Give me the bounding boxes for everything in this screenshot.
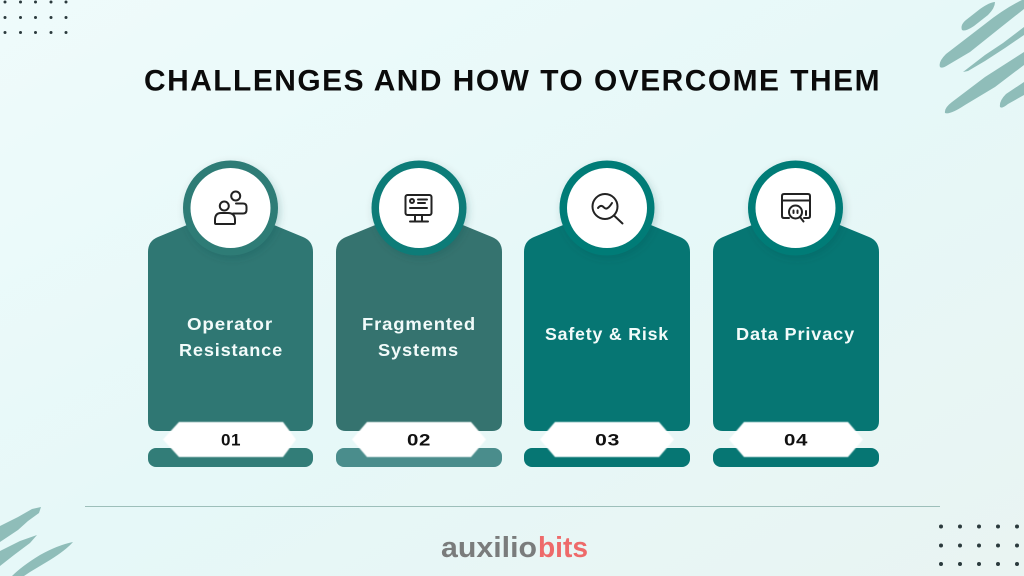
label: Fragmented Systems: Systems (378, 340, 459, 360)
label: Operator Resistance: Operator (187, 314, 273, 334)
number 02: 02 (407, 430, 431, 450)
decoration: top-left dots (4, 0, 68, 34)
icon: monitor (406, 195, 432, 222)
label: Operator Resistance: Resistance (179, 340, 283, 360)
panel: Fragmented Systems (336, 160, 502, 467)
number 04: 04 (784, 430, 808, 450)
panel: Operator Resistance (148, 160, 313, 467)
footer divider (85, 506, 940, 507)
title: CHALLENGES AND HOW TO OVERCOME THEM (144, 64, 881, 98)
decoration: bottom-right dots (939, 524, 1019, 566)
icon: magnifier with trend line (592, 194, 622, 224)
number 03: 03 (595, 430, 620, 450)
label: Operator Resistance (179, 314, 283, 360)
logo: bits (538, 532, 588, 564)
decoration: bottom-left brush strokes (0, 507, 73, 576)
panel: Data Privacy (713, 160, 879, 467)
logo: auxilio (441, 532, 537, 564)
number 01: 01 (221, 430, 241, 450)
icon: browser window with magnifier (782, 194, 810, 222)
logo (441, 532, 588, 564)
icon: operators (215, 192, 246, 224)
panel: Safety & Risk (524, 160, 690, 467)
label: Fragmented Systems: Fragmented (362, 314, 476, 334)
label: Safety & Risk: Safety & Risk (545, 324, 669, 344)
decoration: top-right brush strokes (940, 0, 1024, 113)
label: Fragmented Systems (362, 314, 476, 360)
label: Data Privacy: Data Privacy (736, 324, 855, 344)
